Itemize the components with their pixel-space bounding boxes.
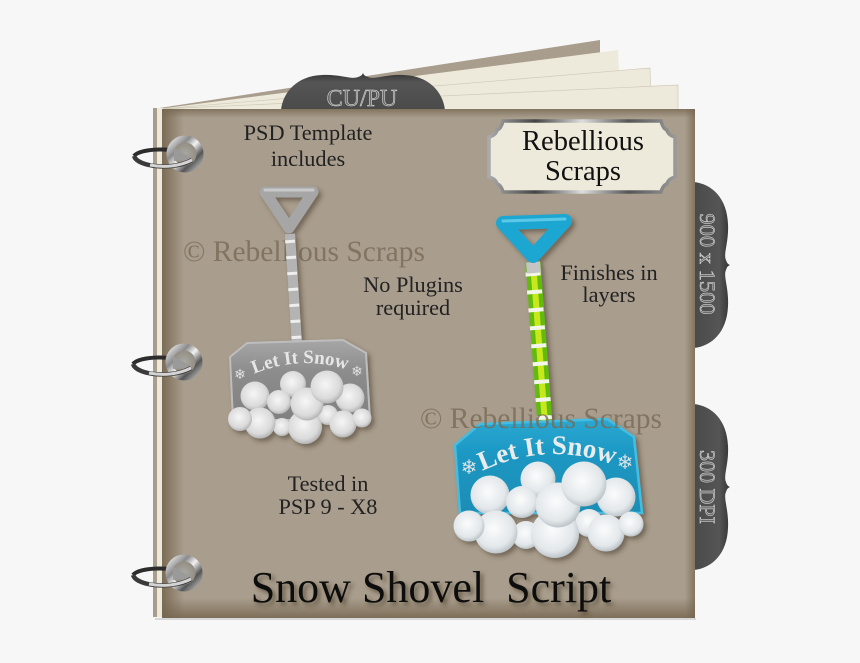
text: PSD Template includes xyxy=(244,120,372,171)
text: No Plugins required xyxy=(363,272,463,320)
tab: CU/PU: CU/PU xyxy=(327,86,397,112)
tab: 300 DPI: 300 DPI xyxy=(695,450,720,524)
blade xyxy=(230,340,370,420)
watermark left: © Rebellious Scraps xyxy=(183,236,425,268)
tab: 900 x 1500: 900 x 1500 xyxy=(695,213,720,315)
watermark right: © Rebellious Scraps xyxy=(420,403,662,435)
ring: bottom xyxy=(133,558,199,588)
snowballs xyxy=(454,462,644,558)
large blue shovel: ❄ xyxy=(617,452,633,474)
text: No Plugins required: No Plugins xyxy=(363,272,463,297)
name plate: Scraps xyxy=(545,156,621,187)
handle xyxy=(265,192,313,228)
ring: top xyxy=(134,139,200,169)
text: Finishes in layers: layers xyxy=(582,282,636,307)
large blue shovel: ❄ xyxy=(461,457,477,479)
book cover panel xyxy=(162,109,695,618)
tab: CU/PU xyxy=(281,73,445,112)
blade xyxy=(455,419,642,513)
text: Finishes in layers xyxy=(560,260,658,307)
book pages xyxy=(153,40,678,125)
ring: middle xyxy=(133,347,199,377)
text: Tested in PSP 9 - X8: PSP 9 - X8 xyxy=(279,494,377,519)
large blue shovel xyxy=(454,214,649,564)
title: Snow Shovel Script xyxy=(251,563,611,612)
text: Tested in PSP 9 - X8 xyxy=(279,471,377,519)
shaft xyxy=(290,234,297,345)
name plate xyxy=(489,121,675,192)
label: Let It Snow xyxy=(476,436,617,471)
small grey shovel xyxy=(228,186,377,450)
label: Let It Snow xyxy=(250,350,349,374)
text: Tested in PSP 9 - X8: Tested in xyxy=(288,471,368,496)
text: No Plugins required: required xyxy=(376,295,450,320)
snowballs xyxy=(228,370,372,444)
name plate: Rebellious xyxy=(522,126,644,157)
small grey shovel: ❄ xyxy=(234,368,246,383)
text: PSD Template includes: PSD Template xyxy=(244,120,372,145)
text: Finishes in layers: Finishes in xyxy=(560,260,658,285)
spine strip xyxy=(153,108,696,620)
tab: 900 x 1500 xyxy=(694,182,730,348)
small grey shovel: ❄ xyxy=(351,365,363,380)
tab: 300 DPI xyxy=(694,404,730,570)
handle xyxy=(503,221,565,256)
text: PSD Template includes: includes xyxy=(271,146,345,171)
shaft xyxy=(533,262,545,424)
